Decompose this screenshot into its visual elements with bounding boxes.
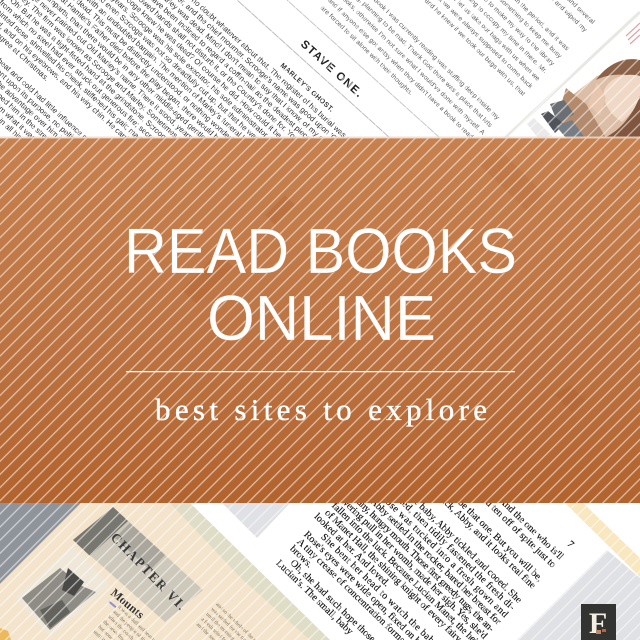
- divider: [126, 371, 515, 372]
- light grey sheet: [517, 550, 640, 640]
- page: stave heading: MARLEY'S GHOST.: [279, 62, 335, 114]
- page: web magazine with portrait: [505, 10, 640, 138]
- page: Christmas Carol text: from which no steel had ever struck out generous fire; secret, and self-contained, and solitary as an oyster. The cold within him: [0, 0, 328, 297]
- subtitle: best sites to explore: [155, 392, 487, 427]
- page: novel text: and smoothed, then tidily fastened the fresh di-: [364, 465, 517, 613]
- panel: orange banner: [0, 138, 640, 503]
- old book page with engraving: Mounts: [108, 586, 147, 622]
- icon: F logo badge: F: [589, 607, 607, 640]
- page: stave heading: STAVE ONE.: [298, 38, 365, 101]
- page: grey novel text: are forced to sit alone with their thoughts.: [319, 5, 414, 97]
- page: novel text: Marie Rose was tucked into a fresh gown and: [357, 472, 510, 620]
- page: Christmas Carol text: pointed nose, shrivelled his cheek, stiffened his gait; made his eyes red, his thin lips blue; and spoke out shrewdly in his: [0, 5, 304, 287]
- page: grey novel text: [320, 0, 596, 138]
- page: grey novel text: and if anyone else got antsy when they didn't have a book to read.: [326, 0, 476, 142]
- page: Christmas Carol text: Oh! But he was a tight-fisted hand at the grindstone, Scrooge! a squeezing, wrenching, grasping, scraping, clutching: [8, 0, 312, 271]
- page: stave heading: [237, 0, 440, 138]
- page: novel text: that tiny, hungry mouth. Those first greedy tugs, the an-: [343, 486, 496, 634]
- old book page with engraving: [0, 503, 330, 640]
- title: READ BOOKS ONLINE: READ BOOKS: [124, 215, 517, 287]
- page: novel text: looked at her. And loved.: [312, 511, 392, 589]
- panel edge: [0, 136, 640, 138]
- old book page with engraving: CHAPTER VI.: [108, 530, 190, 614]
- page: grey novel text: and he knew if we took our bags with us, that: [423, 0, 526, 98]
- page: novel text: you'd be that one. But you will be,: [438, 480, 545, 584]
- page: novel text: swering pull in her womb, made her sigh. Yes, she'd: [336, 493, 489, 640]
- light grey block: [222, 503, 290, 538]
- page: novel text: on the lack, Abby, and it looks real fine: [417, 474, 538, 592]
- title: READ BOOKS ONLINE: ONLINE: [207, 282, 436, 354]
- page: novel text: 7: [565, 539, 576, 550]
- title: READ BOOKS ONLINE: [128, 228, 514, 340]
- page: Christmas Carol text: [0, 0, 349, 138]
- page: novel text: Done, Abby settled in the rocker, bared her breast for: [350, 479, 504, 628]
- bottom grey corner: [0, 503, 81, 584]
- yellow band: [565, 503, 640, 577]
- page: novel text: the baby, Abby tickled and cooed. She: [406, 491, 524, 606]
- page: novel text: brows.: [288, 544, 315, 570]
- page: novel text: Lucian's. The small, baby: [274, 558, 355, 637]
- page: novel text: and ten off of spite just to: [476, 491, 558, 570]
- page: novel text: And the one who is'll: [497, 495, 566, 563]
- icon: F logo badge: [581, 604, 616, 640]
- page: novel text: [276, 503, 575, 640]
